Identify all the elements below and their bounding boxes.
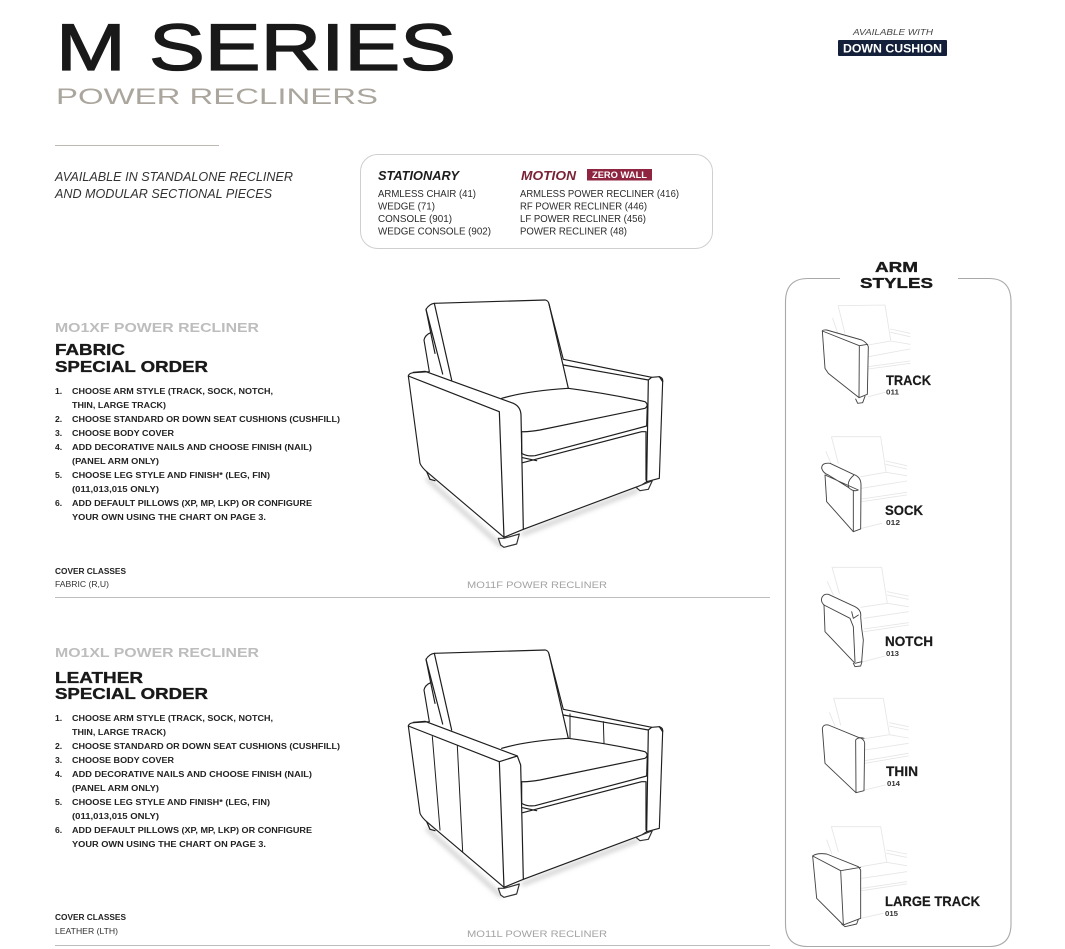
instructions list: 3.: [55, 755, 62, 765]
instructions list: 2.: [55, 741, 62, 751]
instructions list: 2.: [55, 414, 62, 424]
cover classes: [55, 566, 126, 589]
badge: available with down cushion: DOWN CUSHION: [843, 44, 942, 56]
arm style: notch: [821, 567, 933, 667]
instructions list: ADD DECORATIVE NAILS AND CHOOSE FINISH (NAIL): [72, 442, 312, 452]
motion list: POWER RECLINER (48): [520, 226, 627, 238]
stationary list: ARMLESS CHAIR (41): [378, 189, 476, 200]
subtitle: POWER RECLINERS: [56, 84, 378, 109]
panel: leather recliner text: [55, 645, 340, 936]
illustration: fabric recliner: [408, 300, 663, 547]
instructions list: (011,013,015 ONLY): [72, 811, 159, 821]
instructions list: 1.: [55, 713, 62, 723]
arm style: notch: NOTCH: [885, 633, 933, 649]
arm style: track: TRACK: [886, 372, 931, 388]
arm style: thin: THIN: [886, 763, 918, 779]
motion list: [520, 168, 679, 238]
fabric heading: FABRIC: [55, 342, 125, 359]
instructions list: 4.: [55, 442, 62, 452]
fabric heading: SPECIAL ORDER: [55, 359, 208, 376]
arm style: sock: 012: [886, 518, 900, 527]
stationary list: WEDGE (71): [378, 202, 435, 212]
arm style: sock: SOCK: [885, 502, 923, 518]
illustration: leather recliner: [408, 650, 663, 897]
arm style: thin: 014: [887, 779, 901, 788]
instructions list: (PANEL ARM ONLY): [72, 456, 159, 466]
instructions list: ADD DEFAULT PILLOWS (XP, MP, LKP) OR CONFIGURE: [72, 825, 312, 835]
availability note: [54, 170, 293, 201]
instructions list: YOUR OWN USING THE CHART ON PAGE 3.: [72, 839, 266, 849]
cover classes: COVER CLASSES: [55, 566, 126, 576]
arm style: thin: [822, 698, 918, 793]
instructions list: ADD DEFAULT PILLOWS (XP, MP, LKP) OR CONFIGURE: [72, 498, 312, 508]
arm styles heading: [860, 260, 933, 292]
badge: available with down cushion: AVAILABLE WITH: [852, 28, 933, 37]
panel: configurations: [360, 154, 712, 248]
instructions list: 5.: [55, 797, 62, 807]
motion list: RF POWER RECLINER (446): [520, 202, 647, 212]
availability note: AVAILABLE IN STANDALONE RECLINER: [54, 170, 293, 184]
badge: available with down cushion: [838, 28, 947, 56]
leather heading: LEATHER: [55, 670, 143, 687]
arm styles heading: STYLES: [860, 276, 933, 292]
arm style: large track: 015: [885, 909, 898, 918]
cover classes: FABRIC (R,U): [55, 579, 109, 589]
instructions list: ADD DECORATIVE NAILS AND CHOOSE FINISH (NAIL): [72, 769, 312, 779]
instructions list: CHOOSE LEG STYLE AND FINISH* (LEG, FIN): [72, 470, 270, 480]
fabric heading: [55, 342, 208, 376]
motion list: ZERO WALL: [592, 170, 648, 180]
panel: fabric recliner text: [55, 320, 340, 589]
instructions list: CHOOSE STANDARD OR DOWN SEAT CUSHIONS (CUSHFILL): [72, 741, 340, 751]
illustration: notch arm: [821, 567, 908, 667]
instructions list: 6.: [55, 825, 62, 835]
panel: arm styles: [786, 260, 1011, 946]
instructions list: THIN, LARGE TRACK): [72, 400, 166, 410]
motion list: ARMLESS POWER RECLINER (416): [520, 189, 679, 200]
arm style: large track: LARGE TRACK: [885, 893, 980, 909]
instructions list: YOUR OWN USING THE CHART ON PAGE 3.: [72, 512, 266, 522]
arm style: sock: [822, 437, 923, 532]
illustration: track arm: [822, 305, 910, 403]
instructions list: 1.: [55, 386, 62, 396]
stationary list: WEDGE CONSOLE (902): [378, 226, 491, 238]
arm style: notch: 013: [886, 649, 899, 658]
arm style: track: [822, 305, 931, 403]
illustration: sock arm: [822, 437, 907, 532]
instructions list: CHOOSE ARM STYLE (TRACK, SOCK, NOTCH,: [72, 713, 273, 723]
instructions list: THIN, LARGE TRACK): [72, 727, 166, 737]
instructions list: CHOOSE LEG STYLE AND FINISH* (LEG, FIN): [72, 797, 270, 807]
instructions list: 4.: [55, 769, 62, 779]
cover classes: LEATHER (LTH): [55, 926, 118, 936]
instructions list: [55, 713, 340, 849]
stationary list: STATIONARY: [378, 168, 460, 183]
title: M SERIES: [56, 11, 456, 84]
instructions list: CHOOSE ARM STYLE (TRACK, SOCK, NOTCH,: [72, 386, 273, 396]
instructions list: [55, 386, 340, 522]
instructions list: CHOOSE BODY COVER: [72, 755, 175, 765]
leather heading: SPECIAL ORDER: [55, 686, 208, 703]
arm style: track: 011: [886, 388, 899, 396]
caption: fabric recliner: MO11F POWER RECLINER: [467, 580, 607, 591]
leather heading: [55, 670, 208, 703]
illustration: large track arm: [813, 826, 907, 927]
stationary list: CONSOLE (901): [378, 214, 452, 225]
arm style: large track: [813, 826, 980, 927]
caption: leather recliner: MO11L POWER RECLINER: [467, 929, 607, 940]
instructions list: (PANEL ARM ONLY): [72, 783, 159, 793]
cover classes: [55, 912, 126, 936]
cover classes: COVER CLASSES: [55, 912, 126, 922]
arm styles heading: ARM: [875, 260, 918, 276]
model heading: MO1XF POWER RECLINER: [55, 320, 260, 335]
instructions list: (011,013,015 ONLY): [72, 484, 159, 494]
model heading: MO1XL POWER RECLINER: [55, 645, 260, 660]
instructions list: 3.: [55, 428, 62, 438]
instructions list: 6.: [55, 498, 62, 508]
instructions list: 5.: [55, 470, 62, 480]
motion list: MOTION: [521, 168, 577, 183]
instructions list: CHOOSE STANDARD OR DOWN SEAT CUSHIONS (CUSHFILL): [72, 414, 340, 424]
instructions list: CHOOSE BODY COVER: [72, 428, 175, 438]
motion list: LF POWER RECLINER (456): [520, 214, 646, 225]
availability note: AND MODULAR SECTIONAL PIECES: [54, 187, 273, 201]
illustration: thin arm: [822, 698, 908, 793]
stationary list: [378, 168, 491, 238]
